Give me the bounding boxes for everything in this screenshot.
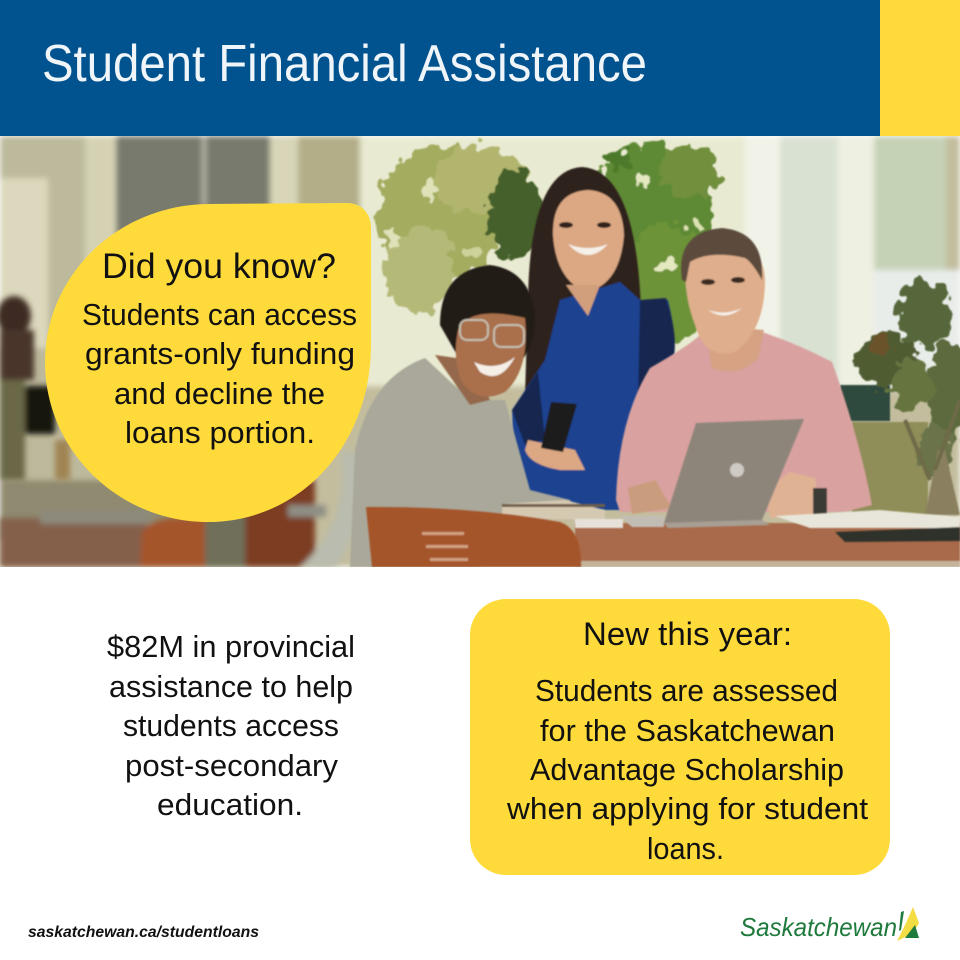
books [502,500,623,528]
callout body: Students can access [82,297,357,332]
table at right [575,523,960,567]
website link: saskatchewan.ca/studentloans [28,924,259,941]
text block: provincial assistance: $82M in provincial [107,629,355,664]
panel body: for the Saskatchewan [540,713,835,748]
text block: provincial assistance [107,629,355,822]
callout heading: Did you know? [102,247,336,286]
panel body [506,673,868,866]
text block: provincial assistance: education. [157,787,303,822]
callout body: grants-only funding [85,336,355,371]
foliage behind students [378,144,720,347]
logo: Saskatchewan: Saskatchewan [740,912,897,942]
callout: new this year [470,599,890,875]
callout body [82,297,357,450]
laptop [620,419,804,528]
panel body: Students are assessed [535,673,838,708]
photo: three students at a table [0,136,960,567]
student: man in pink sweater [616,228,872,518]
student: man with glasses in gray sweater [350,265,574,567]
panel body: Advantage Scholarship [530,752,844,787]
panel body: loans. [647,831,724,866]
orange chair [366,507,581,567]
text block: provincial assistance: post-secondary [125,748,338,783]
panel heading: New this year: [583,616,792,652]
callout: did you know [45,203,371,522]
callout body: and decline the [114,376,325,411]
text block: provincial assistance: students access [123,708,339,743]
panel body: when applying for student [506,791,868,826]
icon: wheat leaf [897,907,919,941]
header banner [0,0,960,136]
title: Student Financial Assistance [42,35,647,93]
callout body: loans portion. [125,415,315,450]
student: woman standing with phone [512,167,675,510]
potted plant at right [840,281,960,517]
background: room and windows [0,136,960,567]
papers and tablet on table [775,510,960,542]
background person and furniture at left [0,296,361,567]
text block: provincial assistance: assistance to help [109,669,353,704]
